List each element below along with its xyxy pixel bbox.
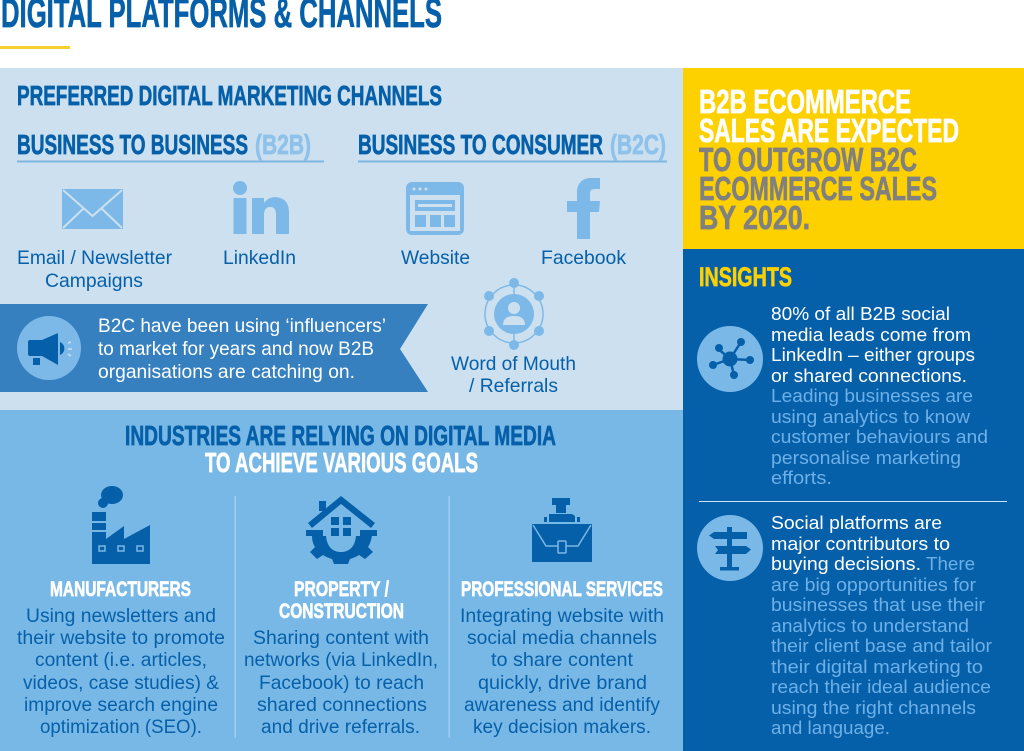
- icon: megaphone: [17, 316, 81, 380]
- body text: key decision makers.: [473, 716, 651, 738]
- icon: linkedin: [233, 181, 289, 234]
- callout white text: B2B ECOMMERCE: [699, 83, 911, 120]
- callout ribbon: influencers: [0, 304, 428, 392]
- insight 2 text: their digital marketing to: [771, 656, 983, 677]
- callout grey text: TO OUTGROW B2C: [699, 141, 917, 178]
- insight 1 text: LinkedIn – either groups: [771, 344, 975, 365]
- body text: networks (via LinkedIn,: [244, 649, 438, 671]
- B2C column heading: (B2C): [610, 129, 666, 160]
- heading: PROFESSIONAL SERVICES: [461, 578, 663, 601]
- panel heading: TO ACHIEVE VARIOUS GOALS: [205, 447, 478, 478]
- heading: MANUFACTURERS: [50, 578, 191, 601]
- body text: content (i.e. articles,: [35, 649, 207, 671]
- body text: optimization (SEO).: [40, 716, 202, 738]
- label: facebook: Facebook: [541, 247, 626, 269]
- panel heading: [125, 420, 556, 478]
- panel: industries: [0, 410, 683, 751]
- insight 1 text: personalise marketing: [771, 447, 961, 468]
- callout text: organisations are catching on.: [98, 361, 355, 383]
- body text: videos, case studies) &: [23, 672, 219, 694]
- insight 2 text: are big opportunities for: [771, 574, 976, 595]
- body text: Using newsletters and: [26, 605, 216, 627]
- icon: briefcase: [532, 498, 592, 562]
- panel: preferred digital marketing channels: [0, 68, 683, 410]
- label: word of mouth / referrals: Word of Mouth: [451, 353, 576, 375]
- insight 2 text: businesses that use their: [771, 594, 985, 615]
- insights heading: INSIGHTS: [699, 262, 792, 292]
- body text: quickly, drive brand: [478, 672, 647, 694]
- callout white text: [699, 83, 959, 149]
- insight 2 text: reach their ideal audience: [771, 676, 991, 697]
- heading: PROPERTY /: [294, 578, 389, 601]
- insight 2 text: analytics to understand: [771, 615, 969, 636]
- panel heading: PREFERRED DIGITAL MARKETING CHANNELS: [17, 80, 442, 111]
- callout grey text: [699, 141, 937, 236]
- icon: email envelope: [62, 189, 123, 229]
- body text: Facebook) to reach: [259, 672, 424, 694]
- body text: [460, 605, 664, 738]
- body text: Sharing content with: [253, 627, 429, 649]
- body text: social media channels: [467, 627, 657, 649]
- insight 1 text: [771, 303, 988, 488]
- body text: their website to promote: [17, 627, 225, 649]
- B2C column heading: BUSINESS TO CONSUMER: [358, 129, 603, 160]
- insight 2 text: There: [926, 553, 975, 574]
- icon: house and gear: [306, 496, 377, 564]
- insight 1 text: or shared connections.: [771, 365, 967, 386]
- label: word of mouth / referrals: [451, 353, 576, 397]
- title accent line: [0, 46, 70, 49]
- body text: and drive referrals.: [261, 716, 420, 738]
- body text: shared connections: [257, 694, 427, 716]
- insight 2 text: and language.: [771, 717, 890, 738]
- heading: [279, 578, 404, 623]
- callout text: [98, 315, 386, 383]
- label: email / newsletter: [17, 247, 172, 292]
- label: email / newsletter: Email / Newsletter: [17, 247, 172, 269]
- icon: word of mouth network: [484, 278, 544, 350]
- insight 1 text: customer behaviours and: [771, 426, 988, 447]
- icon: factory: [92, 486, 150, 564]
- column: professional services: [460, 498, 664, 738]
- body text: [244, 627, 438, 738]
- insight 2 text: using the right channels: [771, 697, 976, 718]
- icon: network nodes: [697, 326, 763, 392]
- insight 1 text: Leading businesses are: [771, 385, 973, 406]
- body text: awareness and identify: [464, 694, 660, 716]
- B2B column heading: (B2B): [255, 129, 311, 160]
- column: manufacturers: [17, 486, 225, 738]
- callout text: to market for years and now B2B: [98, 338, 374, 360]
- insight 1 text: efforts.: [771, 467, 832, 488]
- column: property / construction: [244, 496, 438, 738]
- label: word of mouth / referrals: / Referrals: [469, 375, 558, 397]
- insight 2 text: Social platforms are: [771, 512, 942, 533]
- body text: [17, 605, 225, 738]
- heading: CONSTRUCTION: [279, 600, 404, 623]
- insight 2 text: buying decisions.: [771, 553, 921, 574]
- callout grey text: BY 2020.: [699, 199, 810, 236]
- label: website: Website: [401, 247, 470, 269]
- icon: website browser: [406, 182, 464, 235]
- insight 2 text: major contributors to: [771, 533, 950, 554]
- body text: to share content: [491, 649, 634, 671]
- panel: B2B ecommerce callout: [683, 68, 1024, 249]
- icon: signpost: [697, 515, 763, 581]
- B2B column heading: BUSINESS TO BUSINESS: [17, 129, 248, 160]
- panel heading: INDUSTRIES ARE RELYING ON DIGITAL MEDIA: [125, 420, 556, 451]
- insight 1 text: 80% of all B2B social: [771, 303, 950, 324]
- label: linkedin: LinkedIn: [223, 247, 296, 269]
- insight 1 text: media leads come from: [771, 324, 971, 345]
- icon: facebook: [567, 178, 600, 239]
- insight 2 text: [771, 512, 992, 738]
- panel: insights: [683, 249, 1024, 751]
- body text: improve search engine: [24, 694, 218, 716]
- insight 2 text: their client base and tailor: [771, 635, 992, 656]
- body text: Integrating website with: [460, 605, 664, 627]
- label: email / newsletter: Campaigns: [45, 270, 143, 292]
- insight 1 text: using analytics to know: [771, 406, 971, 427]
- callout text: B2C have been using ‘influencers’: [98, 315, 386, 337]
